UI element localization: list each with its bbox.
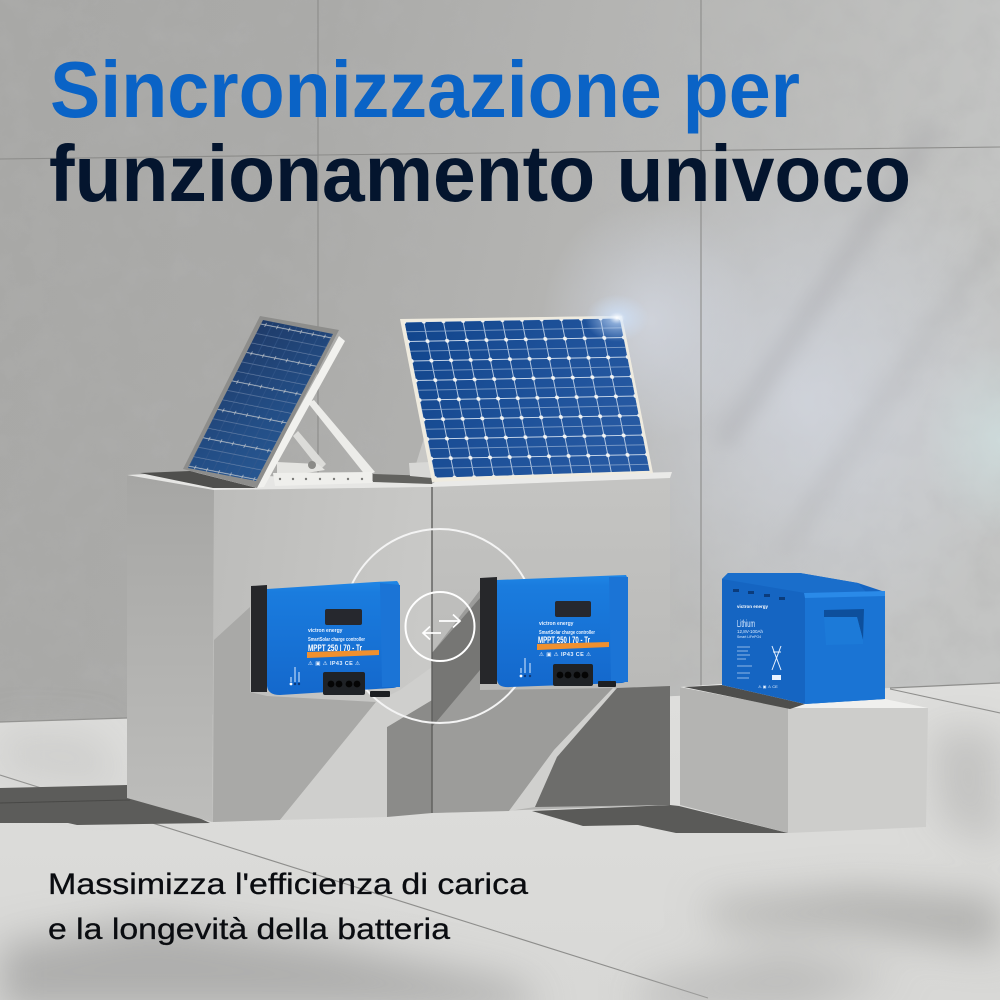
charge controller: left: SmartSolar charge controller — [308, 637, 366, 643]
charge controller: left: victron energy — [308, 628, 343, 634]
title: Sincronizzazione per — [50, 45, 800, 134]
sync circle inner with arrows — [406, 592, 474, 661]
lithium battery — [722, 573, 885, 704]
title: funzionamento univoco — [49, 129, 911, 218]
block: small plinth — [680, 684, 928, 833]
caption: e la longevità della batteria — [48, 913, 450, 946]
solar panel: left, tilted — [183, 316, 375, 488]
title — [49, 45, 911, 218]
block: right plinth — [432, 472, 672, 813]
charge controller: right: SmartSolar charge controller — [539, 630, 596, 636]
sync circle outer — [342, 529, 536, 723]
charge controller: right: MPPT 250 | 70 - Tr — [538, 635, 590, 646]
charge controller: right: ⚠ ▣ ⚠ IP43 CE ⚠ — [539, 652, 591, 658]
charge controller: left: MPPT 250 | 70 - Tr — [308, 643, 362, 654]
solar panel: right — [400, 294, 653, 482]
caption: Massimizza l'efficienza di carica — [48, 868, 528, 901]
floor shadows — [0, 785, 788, 833]
concrete floor — [0, 683, 1000, 1000]
charge controller: left — [251, 581, 400, 697]
charge controller: left: ⚠ ▣ ⚠ IP43 CE ⚠ — [308, 661, 360, 667]
lithium battery: Lithium — [737, 618, 755, 630]
charge controller: right — [480, 575, 628, 687]
lithium battery: ⚠ ▣ ⚠ CE — [758, 684, 778, 689]
caption — [48, 868, 528, 946]
lithium battery: victron energy — [737, 604, 769, 609]
lithium battery: Smart LiFePO4 — [737, 635, 761, 639]
concrete wall background — [0, 0, 1000, 725]
lithium battery: 12,8V-100Ah — [737, 629, 764, 634]
block: left plinth — [127, 471, 432, 822]
floor dappled shade — [0, 730, 1000, 1000]
charge controller: right: victron energy — [539, 621, 574, 627]
